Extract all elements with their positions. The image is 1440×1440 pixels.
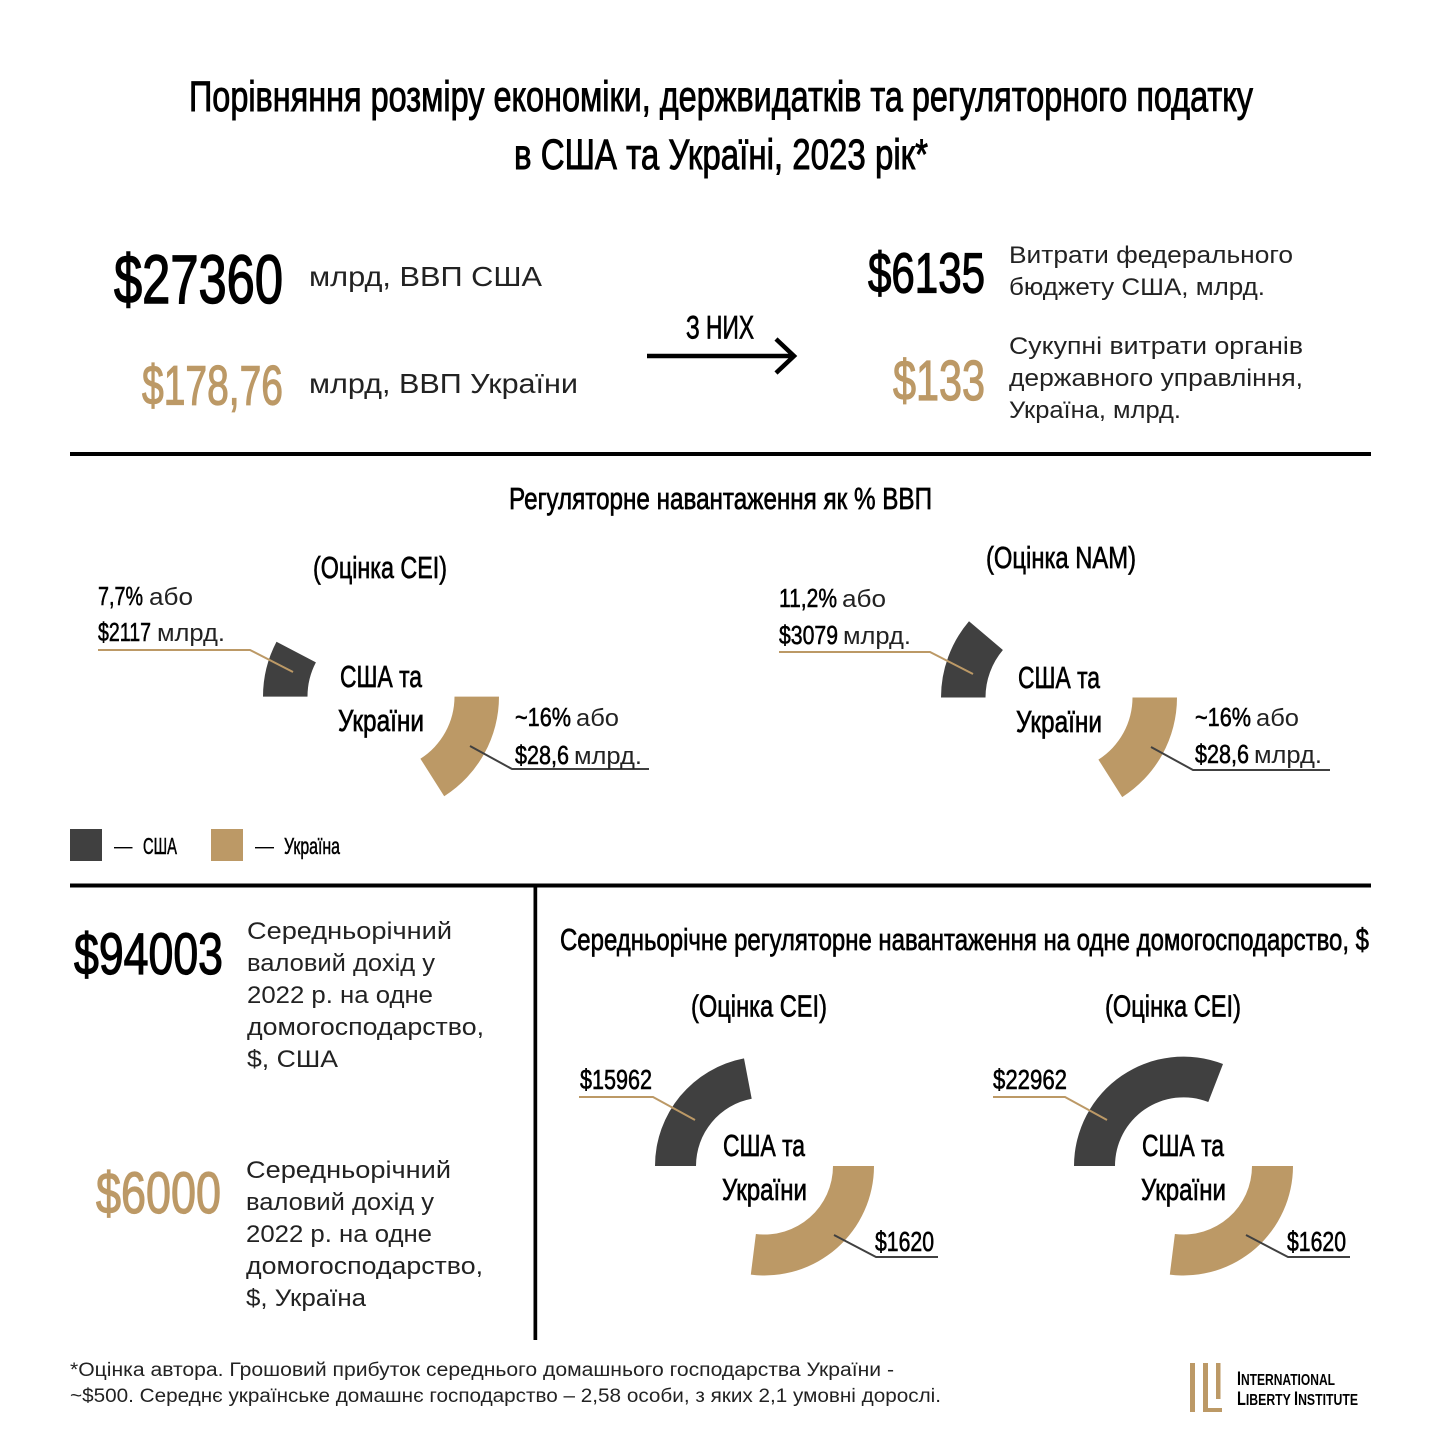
stat: Ukraine spending: $133 [893, 349, 985, 413]
footnote: *Оцінка автора. Грошовий прибуток середнього домашнього господарства України - [70, 1360, 894, 1381]
logo: INTERNATIONAL [1237, 1369, 1335, 1390]
chart: NAM estimate: США та [1018, 660, 1101, 695]
chart: CEI estimate: млрд. [157, 620, 225, 647]
stat: US household income: Середньорічний [247, 918, 452, 945]
legend: США [143, 833, 177, 859]
chart: CEI estimate: $28,6 [515, 740, 569, 770]
panel: GDP figures [114, 241, 578, 416]
stat: US GDP: млрд, ВВП США [309, 261, 542, 292]
stat: US GDP: $27360 [114, 241, 283, 318]
stat: Ukraine household income: $6000 [96, 1161, 221, 1226]
stat: Ukraine household income [96, 1157, 483, 1312]
stat: US budget [868, 242, 1293, 306]
chart: CEI estimate: $2117 [98, 617, 151, 647]
chart: household CEI left [579, 988, 938, 1275]
stat: US household income [74, 918, 484, 1073]
chart: household CEI left: США та [723, 1128, 806, 1163]
chart: NAM estimate: (Оцінка NAM) [986, 540, 1136, 575]
stat: US household income: домогосподарство, [247, 1014, 484, 1041]
stat: US budget: бюджету США, млрд. [1009, 274, 1265, 301]
stat: US budget: Витрати федерального [1009, 242, 1293, 269]
chart: CEI estimate: ~16% [515, 702, 571, 732]
chart: household CEI left: $1620 [875, 1226, 934, 1257]
stat: US household income: 2022 р. на одне [247, 982, 433, 1009]
stat: Ukraine spending: Україна, млрд. [1009, 397, 1181, 424]
chart: NAM estimate: або [842, 586, 886, 613]
chart: CEI estimate: млрд. [574, 743, 642, 770]
chart: NAM estimate: $3079 [779, 620, 838, 650]
chart: household CEI left: України [722, 1172, 807, 1207]
legend [70, 829, 340, 861]
chart: CEI estimate: США та [340, 659, 423, 694]
stat: Ukraine GDP: млрд, ВВП України [309, 368, 578, 399]
chart: NAM estimate: 11,2% [779, 583, 837, 613]
stat: Ukraine household income: $, Україна [246, 1285, 367, 1312]
chart: household CEI left: $15962 [580, 1064, 652, 1095]
legend: Україна [284, 833, 340, 859]
stat: Ukraine household income: валовий дохід у [246, 1189, 434, 1216]
title: в США та Україні, 2023 рік* [514, 131, 928, 179]
arrow: of which [647, 310, 794, 373]
chart: CEI estimate: або [149, 584, 193, 611]
chart: household CEI right: України [1141, 1172, 1226, 1207]
chart: household CEI left: (Оцінка CEI) [691, 988, 827, 1024]
chart: CEI estimate: (Оцінка CEI) [313, 550, 447, 585]
logo: LIBERTY INSTITUTE [1237, 1389, 1358, 1410]
stat: Ukraine spending: Сукупні витрати органів [1009, 333, 1303, 360]
stat: Ukraine GDP: $178,76 [142, 354, 283, 416]
stat: US household income: $, США [247, 1046, 338, 1073]
stat: US household income: $94003 [74, 922, 223, 987]
stat: Ukraine spending: державного управління, [1009, 365, 1303, 392]
chart: NAM estimate [779, 540, 1330, 797]
chart: NAM estimate: млрд. [1254, 742, 1322, 769]
chart: household CEI right: $1620 [1287, 1226, 1346, 1257]
chart: NAM estimate: України [1016, 704, 1102, 739]
chart: household CEI right: (Оцінка CEI) [1105, 988, 1241, 1024]
panel: budget spending [868, 242, 1303, 424]
footnote: ~$500. Середнє українське домашнє господарство – 2,58 особи, з яких 2,1 умовні дорослі. [70, 1386, 941, 1407]
stat: Ukraine GDP [142, 354, 578, 416]
stat: US GDP [114, 241, 542, 318]
chart: NAM estimate: ~16% [1195, 702, 1251, 732]
logo [1190, 1363, 1358, 1412]
stat: US budget: $6135 [868, 242, 985, 306]
chart: CEI estimate: 7,7% [98, 581, 143, 611]
stat: Ukraine household income: домогосподарство, [246, 1253, 483, 1280]
stat: Ukraine household income: 2022 р. на одне [246, 1221, 432, 1248]
stat: US household income: валовий дохід у [247, 950, 435, 977]
chart: NAM estimate: $28,6 [1195, 739, 1249, 769]
chart: household CEI right: США та [1142, 1128, 1225, 1163]
chart: CEI estimate: України [338, 703, 424, 738]
heading: regulatory burden: Регуляторне навантаження як % ВВП [509, 481, 932, 516]
chart: NAM estimate: млрд. [843, 623, 911, 650]
stat: Ukraine spending [893, 333, 1303, 424]
footnote [70, 1360, 941, 1407]
arrow: of which: З НИХ [686, 310, 754, 346]
title [189, 73, 1253, 179]
chart: NAM estimate: або [1256, 705, 1299, 732]
chart: CEI estimate [98, 550, 649, 796]
panel: household income [74, 918, 484, 1312]
chart: CEI estimate: або [576, 705, 619, 732]
chart: household CEI right: $22962 [993, 1064, 1067, 1095]
stat: Ukraine household income: Середньорічний [246, 1157, 451, 1184]
chart: household CEI right [993, 988, 1350, 1275]
